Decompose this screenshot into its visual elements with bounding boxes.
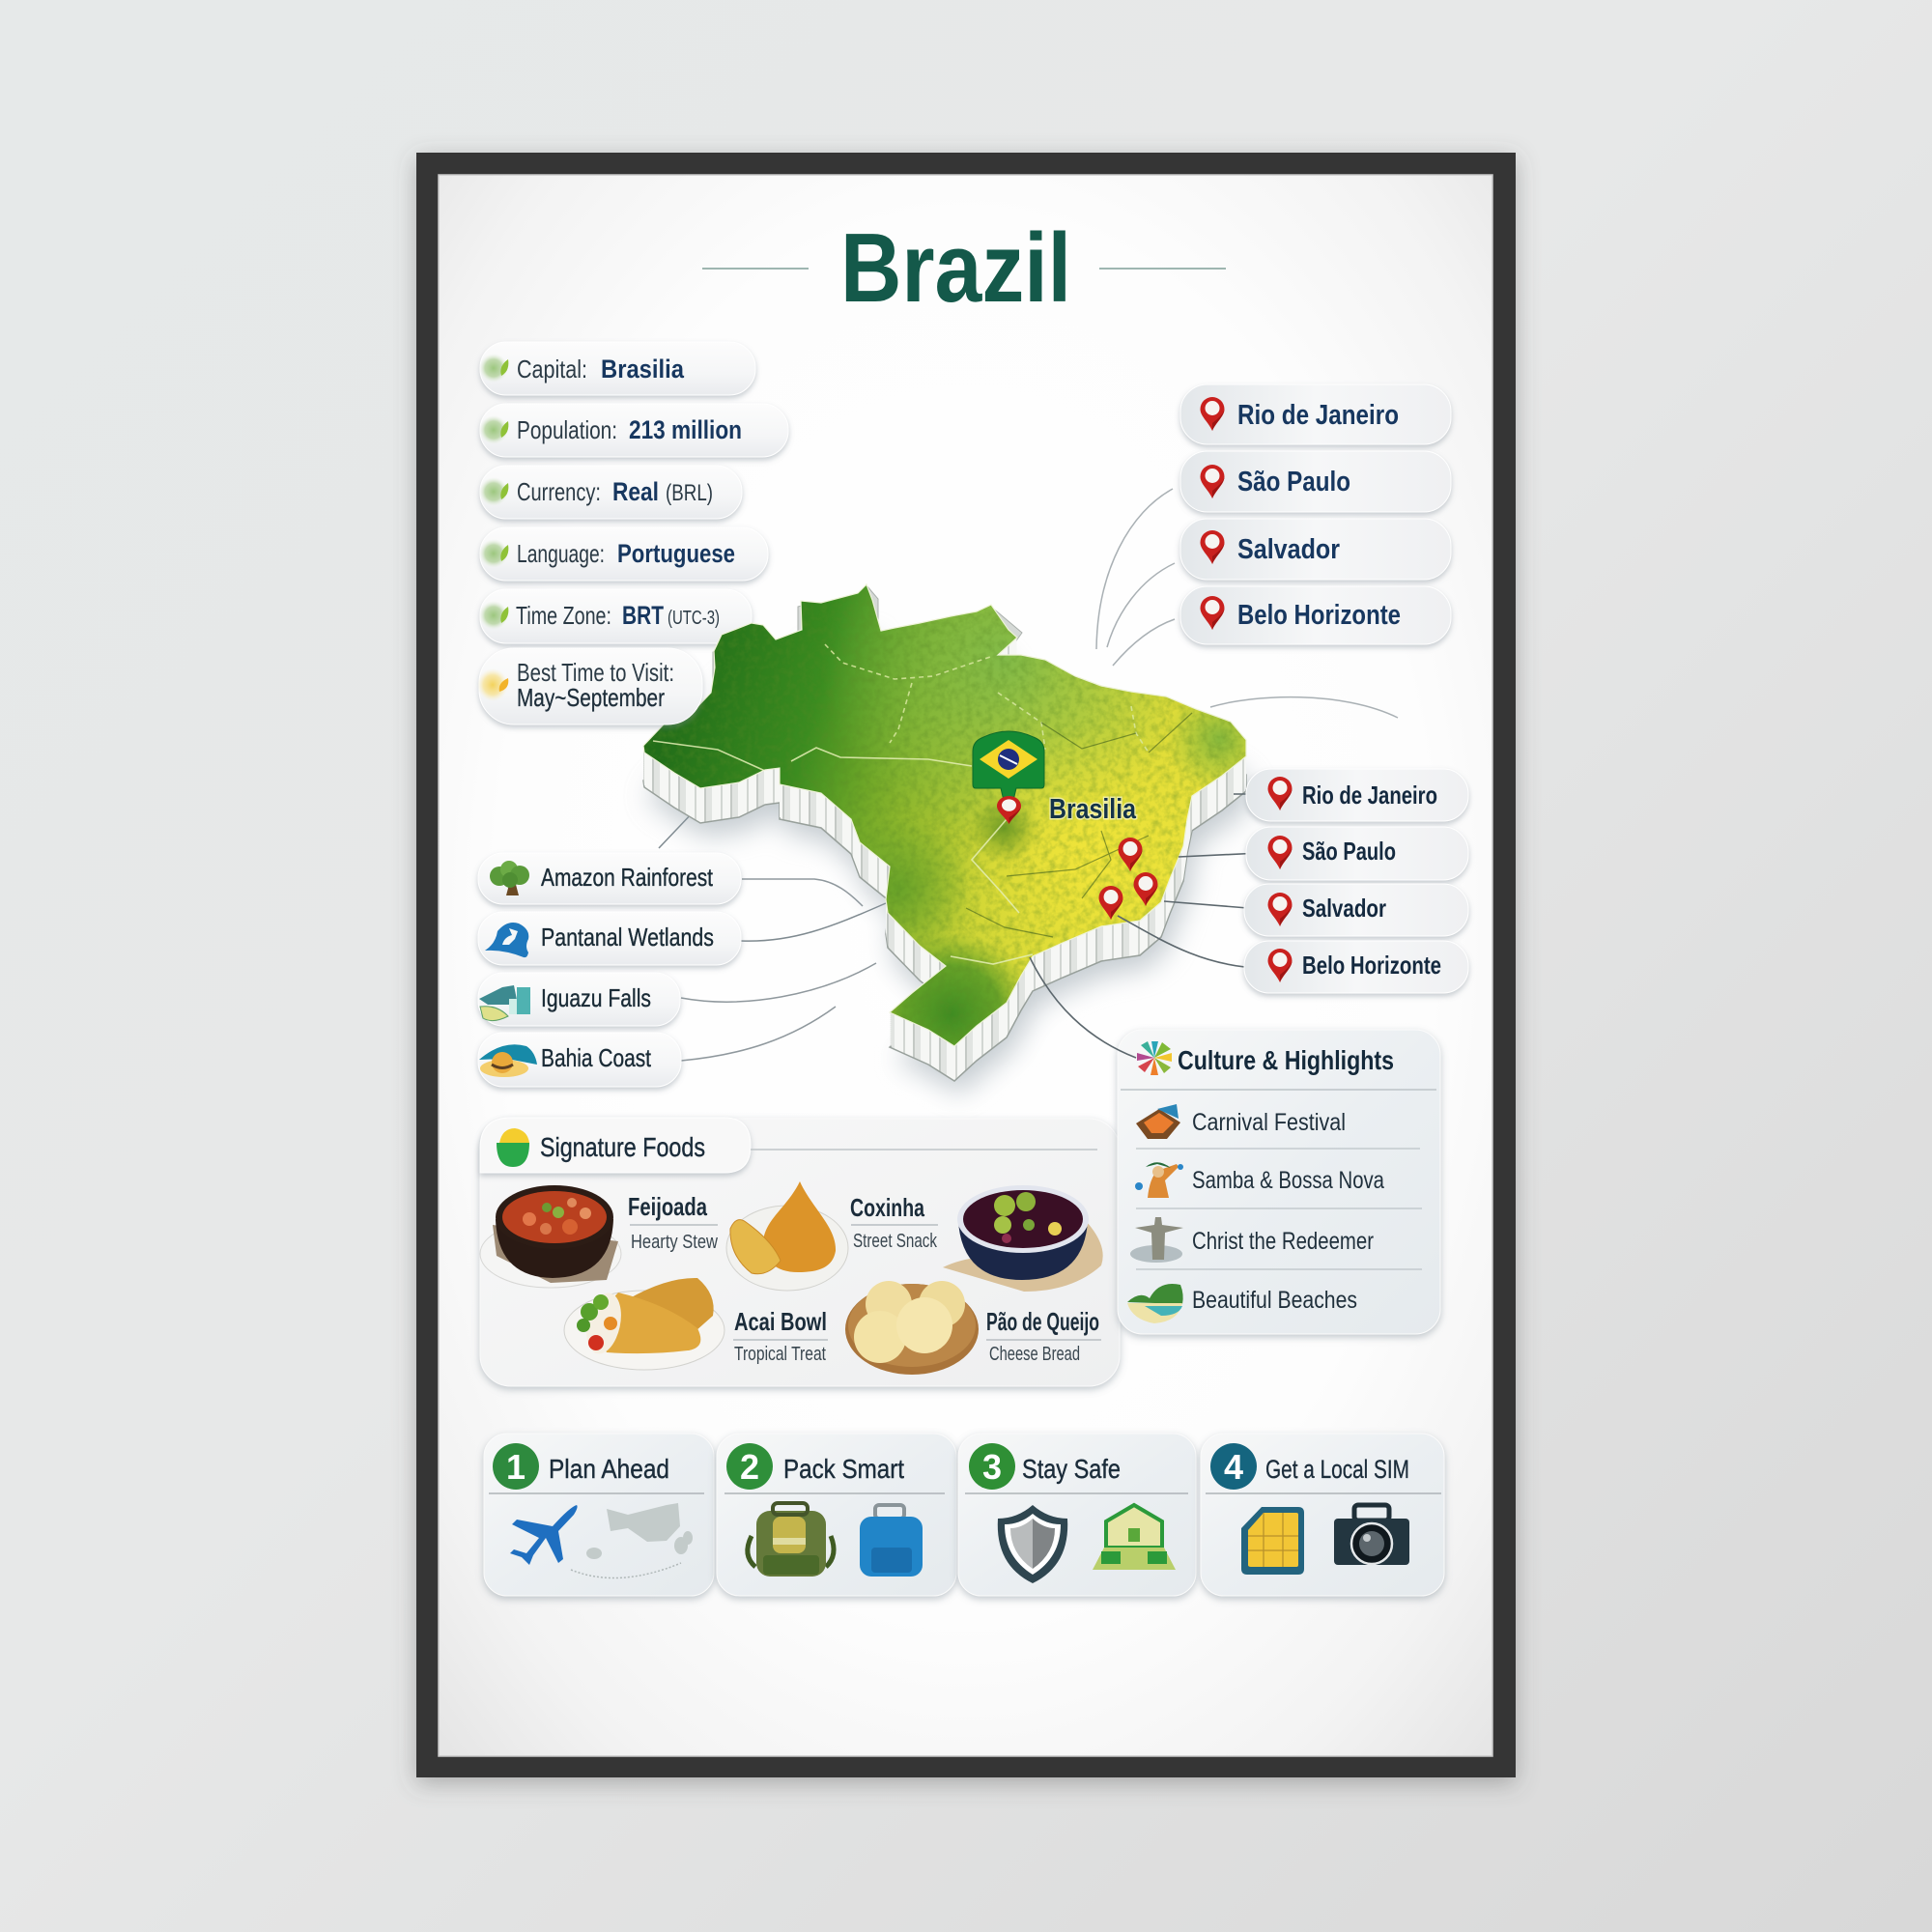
icon: shield [998, 1505, 1067, 1583]
fact: best time to visit: May~September [517, 683, 665, 712]
city: Rio de Janeiro: Rio de Janeiro [1302, 781, 1437, 810]
icon: red pin [997, 796, 1021, 824]
tip 4: local SIM: 4 [1224, 1447, 1243, 1487]
food: feijoada [480, 1185, 718, 1288]
city: Salvador [1180, 519, 1451, 580]
fact: time zone: (UTC-3) [668, 608, 720, 629]
feature: Iguazu Falls: Iguazu Falls [541, 983, 651, 1012]
panel: cities lower [1244, 769, 1468, 993]
city: Belo Horizonte: Belo Horizonte [1302, 951, 1441, 980]
icon: pinwheel [1137, 1041, 1172, 1075]
panel: culture and highlights [1118, 1030, 1440, 1334]
feature: Bahia Coast: Bahia Coast [541, 1043, 652, 1072]
icon: waterfall [479, 985, 530, 1021]
tip 3: stay safe: 3 [982, 1447, 1002, 1487]
city: Belo Horizonte [1244, 941, 1468, 993]
fact: currency: Real [612, 477, 659, 506]
food: coxinha: Street Snack [853, 1231, 938, 1252]
fact: currency [479, 466, 742, 519]
tip 1: plan ahead: Plan Ahead [549, 1454, 669, 1484]
fact: time zone: BRT [622, 601, 664, 630]
city: São Paulo: São Paulo [1237, 467, 1350, 497]
item: beaches: Beautiful Beaches [1192, 1287, 1357, 1314]
tip 1: plan ahead [484, 1434, 714, 1596]
feature: Amazon Rainforest: Amazon Rainforest [541, 863, 714, 892]
icon: SIM card [1241, 1507, 1304, 1575]
item: christ the redeemer: Christ the Redeemer [1192, 1228, 1374, 1255]
map shadow [649, 633, 1252, 1094]
city: São Paulo [1246, 827, 1468, 880]
label: Acai Bowl [734, 1307, 827, 1336]
feature: Bahia Coast [478, 1033, 681, 1087]
fact: time zone [479, 589, 752, 643]
city: Rio de Janeiro [1180, 384, 1451, 444]
icon: wetland [485, 923, 528, 957]
panel: signature foods [480, 1118, 1120, 1386]
food: acai bowl [943, 1185, 1103, 1292]
city: Salvador [1244, 884, 1468, 936]
panel: natural features [478, 853, 741, 1087]
food: pão de queijo: Cheese Bread [989, 1344, 1080, 1365]
city: Salvador: Salvador [1302, 894, 1386, 923]
fact: capital: Brasilia [601, 355, 685, 384]
map state borders [653, 644, 1192, 964]
item: samba: Samba & Bossa Nova [1192, 1167, 1384, 1194]
tip 3: stay safe [958, 1434, 1196, 1596]
fact: language: Language: [517, 539, 605, 568]
label: Pão de Queijo [986, 1307, 1099, 1336]
icon: camera [1334, 1505, 1409, 1565]
city: Belo Horizonte: Belo Horizonte [1237, 600, 1401, 631]
map wall slivers [713, 585, 1022, 700]
tip 2: pack smart: Pack Smart [783, 1454, 904, 1484]
icon: faded map [571, 1503, 693, 1578]
feature: Pantanal Wetlands: Pantanal Wetlands [541, 923, 714, 952]
capital marker: Brasilia [973, 731, 1137, 825]
food: pão de queijo [845, 1281, 1101, 1375]
map of Brazil [628, 580, 1265, 1094]
food: wrap on plate: Tropical Treat [734, 1344, 826, 1365]
panel: travel tips [484, 1434, 1444, 1596]
map extruded walls [643, 586, 1246, 1081]
city: São Paulo: São Paulo [1302, 837, 1396, 866]
fact: population [479, 404, 788, 457]
tip 2: pack smart [717, 1434, 956, 1596]
icon: bowl [497, 1128, 529, 1167]
city: Rio de Janeiro [1246, 769, 1468, 821]
header pill: Signature Foods [540, 1132, 705, 1162]
city: São Paulo [1180, 451, 1451, 512]
icon: flag pin [973, 731, 1044, 821]
icon: tent shelter [1093, 1505, 1176, 1570]
feature: Iguazu Falls [478, 973, 680, 1026]
header pill [480, 1118, 1097, 1173]
fact: time zone: Time Zone: [516, 601, 611, 630]
label: Feijoada [628, 1192, 707, 1221]
fact: capital: Capital: [517, 355, 587, 384]
fact: language [479, 527, 768, 581]
icon: airplane [510, 1505, 578, 1565]
fact: capital [479, 342, 755, 395]
city: Salvador: Salvador [1237, 534, 1340, 565]
item: samba [1135, 1162, 1384, 1198]
fact: population: 213 million [629, 415, 742, 444]
tip 4: local SIM: Get a Local SIM [1265, 1455, 1409, 1484]
title: Brazil [840, 214, 1071, 323]
label: Brasilia [1049, 794, 1137, 825]
connector line: culture [1030, 957, 1136, 1058]
icon: backpack [748, 1503, 834, 1577]
fact: best time to visit [477, 648, 702, 724]
city: Belo Horizonte [1180, 586, 1451, 644]
food: coxinha [726, 1181, 938, 1291]
icon: beach [479, 1044, 537, 1077]
icon: city pins on map [1099, 838, 1157, 920]
poster paper [439, 175, 1492, 1756]
fact: population: Population: [517, 415, 617, 444]
item: beaches [1127, 1284, 1357, 1323]
connector lines [659, 489, 1398, 1061]
icon: tree [490, 861, 529, 895]
panel: cities upper [1180, 384, 1451, 644]
item: christ the redeemer [1130, 1217, 1374, 1263]
heading: Culture & Highlights [1178, 1045, 1394, 1075]
panel: key facts [479, 342, 788, 643]
connector lines: cities lower [1118, 794, 1263, 968]
item: carnival festival: Carnival Festival [1192, 1109, 1346, 1136]
tip 2: pack smart: 2 [740, 1447, 759, 1487]
poster frame [416, 153, 1516, 1777]
label: Coxinha [850, 1193, 924, 1222]
food: feijoada: Hearty Stew [631, 1232, 718, 1253]
tip 1: plan ahead: 1 [506, 1447, 526, 1487]
fact: currency: Currency: [517, 477, 601, 506]
fact: language: Portuguese [617, 539, 735, 568]
fact: best time to visit: Best Time to Visit: [517, 658, 674, 687]
food: wrap on plate [564, 1278, 828, 1370]
tip 3: stay safe: Stay Safe [1022, 1454, 1121, 1484]
feature: Pantanal Wetlands [478, 912, 741, 965]
city: Rio de Janeiro: Rio de Janeiro [1237, 400, 1399, 431]
feature: Amazon Rainforest [478, 853, 741, 904]
item: carnival festival [1136, 1104, 1346, 1139]
tip 4: local SIM [1201, 1434, 1444, 1596]
fact: currency: (BRL) [666, 480, 713, 506]
map top surface [628, 580, 1265, 1053]
icon: blue bag [860, 1505, 923, 1577]
